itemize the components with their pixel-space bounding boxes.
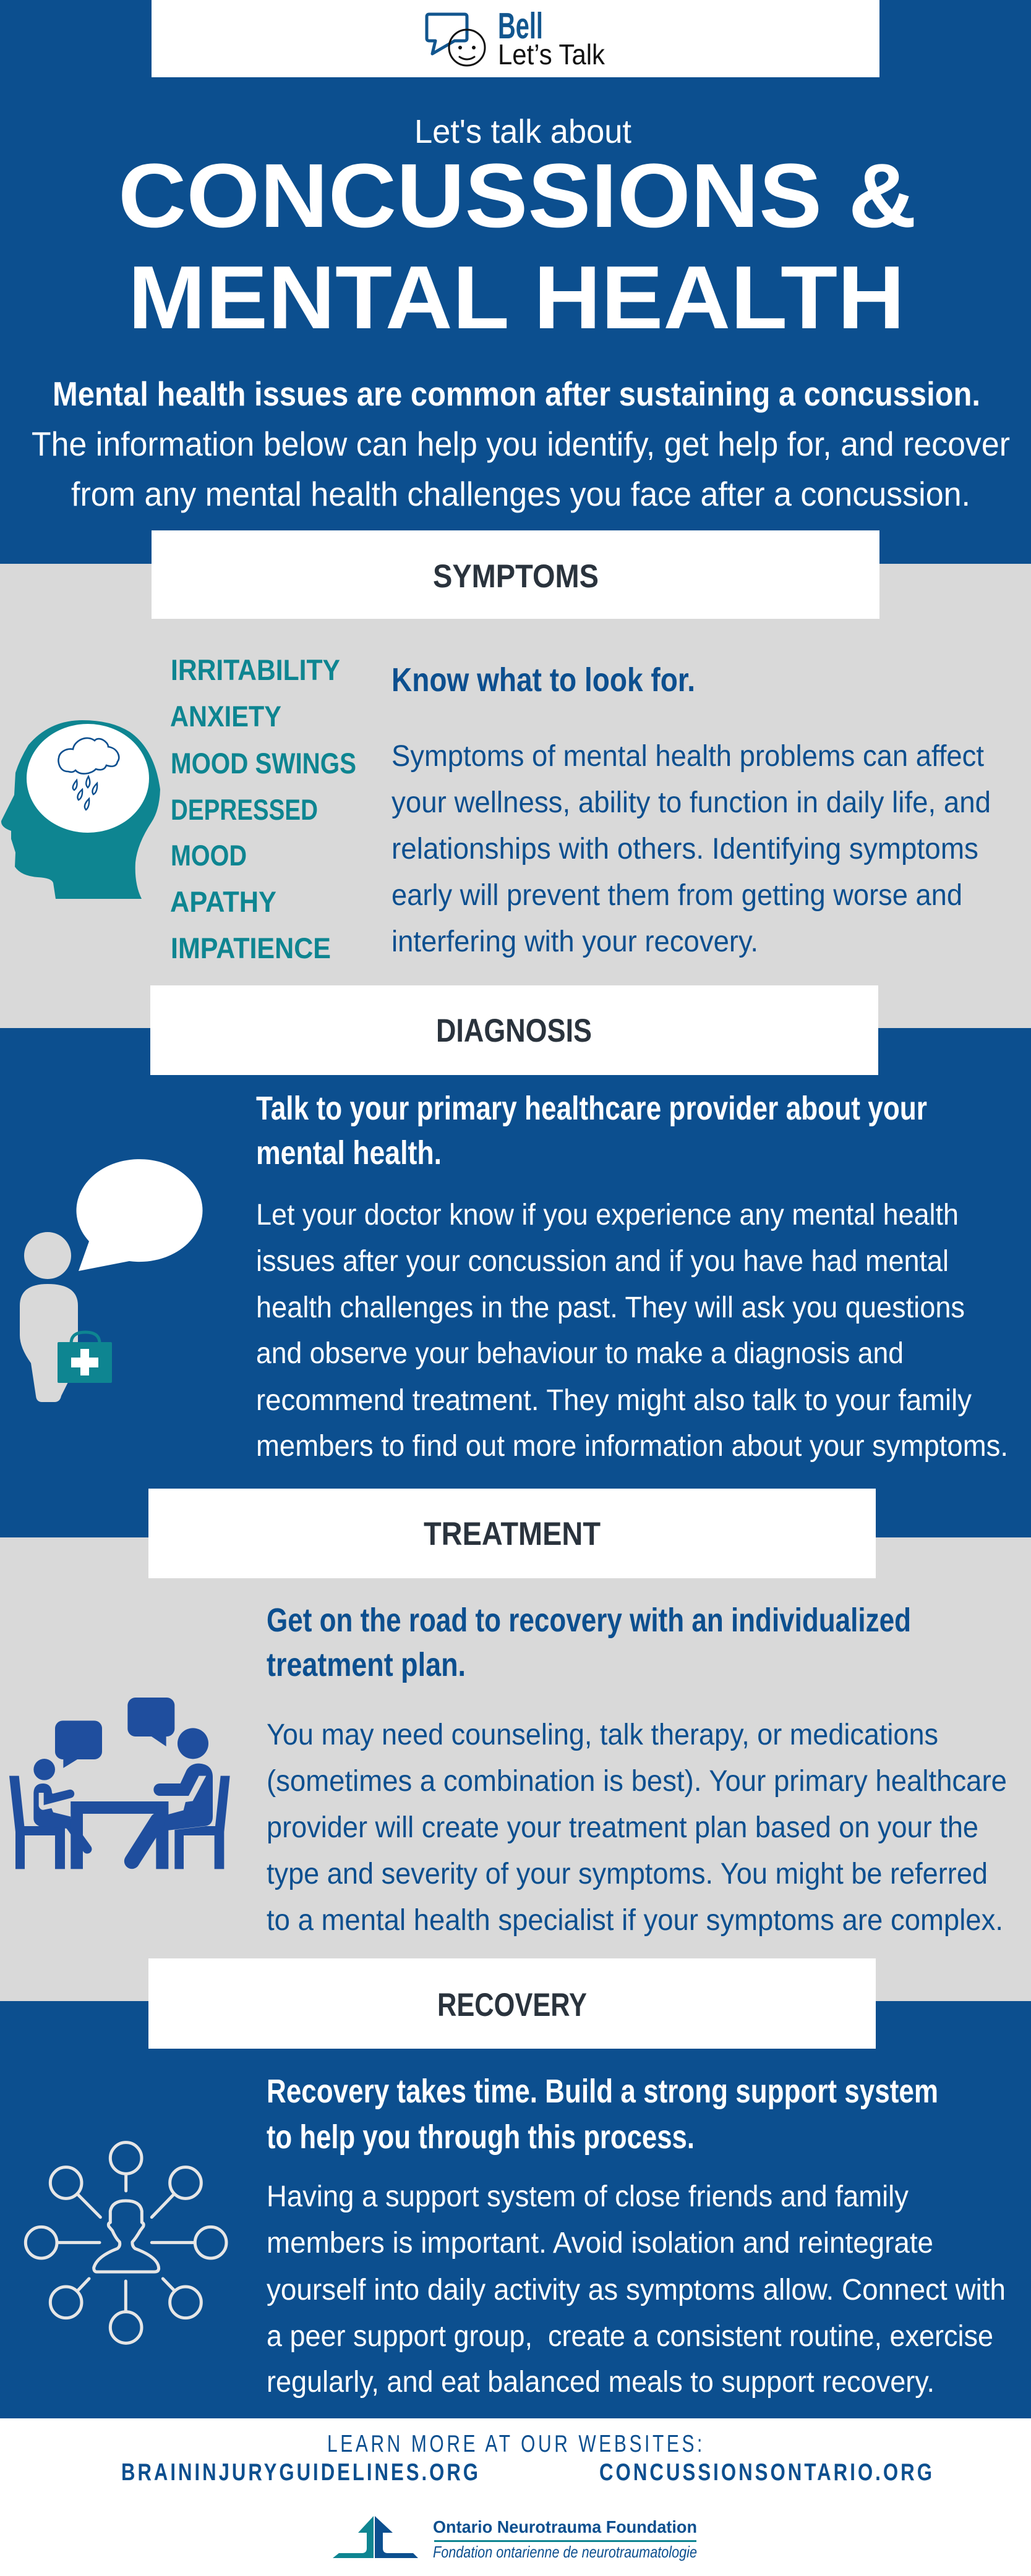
heading bar: treatment: TREATMENT [424,1516,601,1552]
panel: header [0,0,1031,564]
heading bar: recovery: RECOVERY [437,1987,587,2023]
text block: diagnosis: and observe your behaviour to make a diagnosis and [256,1337,904,1370]
icon: two people talking at a table [9,1698,230,1869]
text block: symptoms [391,740,991,958]
panel: diagnosis [0,985,1031,1537]
text block: treatment: to a mental health specialist if your symptoms are complex. [267,1904,1003,1937]
panel: recovery [0,1958,1031,2418]
subheading: talk to your provider [256,1090,927,1171]
logo wordmark: Let’s Talk [498,38,605,70]
text block: recovery: a peer support group, create a consistent routine, exercise [267,2320,993,2353]
logo wordmark: Bell [498,6,543,46]
symptom list: DEPRESSED [171,793,318,826]
text block: recovery: regularly, and eat balanced meals to support recovery. [267,2366,935,2399]
link text: brain injury guidelines: BRAININJURYGUIDELINES.ORG [121,2459,481,2486]
logo text: Fondation ontarienne de neurotraumatologie [433,2543,697,2561]
logo text: Ontario Neurotrauma Foundation [433,2517,697,2536]
text block: treatment: provider will create your treatment plan based on your the [267,1811,978,1844]
text block: recovery: members is important. Avoid isolation and reintegrate [267,2227,933,2259]
icon: support network [25,2143,226,2343]
text block: symptoms: interfering with your recovery. [391,925,758,958]
text block: diagnosis: health challenges in the past. They will ask you questions [256,1291,965,1324]
symptom list [170,653,356,964]
symptom list: APATHY [170,885,276,918]
heading bar: symptoms: SYMPTOMS [433,558,599,595]
symptom list: IRRITABILITY [171,653,340,686]
text block: symptoms: your wellness, ability to function in daily life, and [391,786,991,819]
text block: symptoms: Symptoms of mental health problems can affect [391,740,984,773]
subheading: talk to your provider: mental health. [256,1134,442,1171]
title: MENTAL HEALTH [128,247,905,347]
subheading: know what to look for: Know what to look for. [391,661,695,699]
text block: recovery: yourself into daily activity as symptoms allow. Connect with [267,2274,1006,2306]
text block: diagnosis [256,1199,1008,1463]
heading bar: symptoms [152,530,879,619]
symptom list: ANXIETY [170,700,281,733]
text block: treatment: You may need counseling, talk therapy, or medications [267,1719,938,1751]
logo bar: Bell Let's Talk [152,0,879,77]
symptom list: MOOD [171,839,247,872]
text block: treatment: type and severity of your symptoms. You might be referred [267,1858,988,1890]
icon: head with rain cloud [1,720,160,899]
heading bar: recovery [148,1958,876,2049]
symptom list: MOOD SWINGS [171,747,356,780]
text: learn more: LEARN MORE AT OUR WEBSITES: [327,2431,705,2457]
panel: footer [0,2418,1031,2576]
heading bar: treatment [148,1489,876,1578]
subheading: road to recovery [267,1602,911,1683]
logo text [433,2517,697,2561]
kicker: Let's talk about: Let's talk about [414,113,631,150]
panel: treatment [0,1489,1031,2001]
logo: Ontario Neurotrauma Foundation [333,2516,697,2561]
title: CONCUSSIONS & [118,145,917,247]
heading bar: diagnosis: DIAGNOSIS [436,1013,592,1049]
link text: concussions ontario: CONCUSSIONSONTARIO.ORG [599,2459,935,2486]
title [118,145,917,347]
text block: diagnosis: issues after your concussion and if you have had mental [256,1245,949,1278]
text block: recovery [267,2180,1006,2399]
intro text: from any mental health challenges you face after a concussion. [71,475,970,513]
intro text [32,375,1010,513]
text block: diagnosis: Let your doctor know if you experience any mental health [256,1199,959,1231]
subheading: recovery takes time: to help you through this process. [267,2119,695,2156]
logo wordmark [498,6,605,70]
text block: diagnosis: members to find out more information about your symptoms. [256,1430,1008,1463]
subheading: road to recovery: treatment plan. [267,1646,466,1683]
text block: symptoms: relationships with others. Identifying symptoms [391,833,978,865]
icon: speech bubble with smiley [427,14,485,66]
symptom list: IMPATIENCE [171,932,331,964]
text block: diagnosis: recommend treatment. They might also talk to your family [256,1384,972,1417]
icon: person with speech bubble and medical bag [20,1159,203,1402]
heading bar: diagnosis [150,985,878,1075]
text block: recovery: Having a support system of close friends and family [267,2180,909,2213]
text block: symptoms: early will prevent them from getting worse and [391,879,962,912]
icon: converging arrow [333,2516,418,2558]
text block: treatment: (sometimes a combination is best). Your primary healthcare [267,1765,1007,1798]
panel: symptoms [0,530,1031,1028]
text block: treatment [267,1719,1007,1937]
subheading: recovery takes time [267,2073,938,2156]
